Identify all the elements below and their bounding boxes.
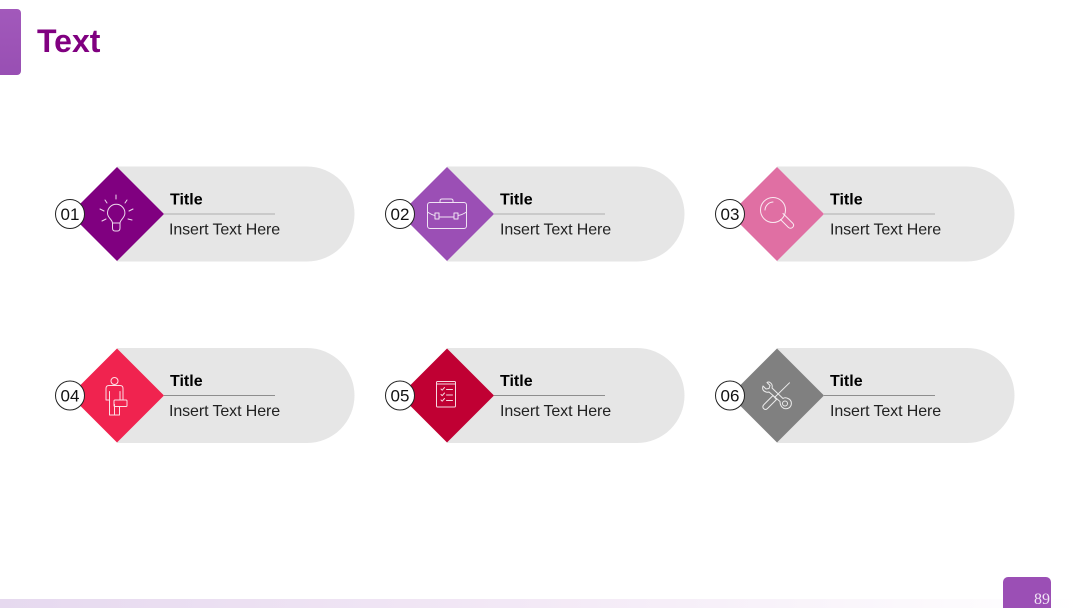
icon: briefcase (428, 199, 466, 228)
divider and card text (824, 373, 941, 420)
card 04 (56, 348, 354, 443)
icon: person with briefcase (106, 378, 127, 415)
number badge (386, 200, 414, 228)
pill background (447, 166, 684, 262)
number badge: 02 (391, 205, 409, 224)
icon: light bulb (100, 195, 133, 231)
card 06 (716, 348, 1014, 443)
divider and card text: Insert Text Here (830, 222, 941, 238)
diamond (400, 167, 494, 261)
divider and card text (494, 373, 611, 420)
diamond (70, 348, 164, 442)
divider and card text: Title (170, 192, 203, 208)
diamond (400, 348, 494, 442)
divider and card text: Insert Text Here (169, 403, 280, 420)
page number tab (1003, 577, 1051, 608)
pill background (777, 166, 1014, 262)
divider and card text: Insert Text Here (169, 222, 280, 238)
number badge: 03 (721, 205, 739, 224)
card 05 (386, 348, 684, 443)
pill background (777, 348, 1014, 443)
header accent tab (0, 9, 21, 75)
icon: checklist clipboard (436, 382, 456, 407)
divider and card text (494, 192, 611, 238)
divider and card text: Title (830, 192, 863, 208)
number badge: 01 (61, 205, 79, 224)
number badge (56, 381, 84, 410)
card 02 (386, 166, 684, 262)
icon: wrench and screwdriver (763, 382, 791, 410)
divider and card text (164, 192, 280, 238)
pill background (447, 348, 684, 443)
number badge: 06 (721, 386, 739, 406)
footer gradient bar (0, 599, 1080, 608)
divider and card text (824, 192, 941, 238)
card 03 (716, 166, 1014, 262)
pill background (117, 166, 354, 262)
divider and card text: Insert Text Here (500, 403, 611, 420)
page number: 89 (1034, 591, 1050, 608)
diamond (70, 167, 164, 261)
pill background (117, 348, 354, 443)
number badge: 04 (61, 386, 79, 406)
number badge: 05 (391, 386, 409, 406)
divider and card text: Insert Text Here (830, 403, 941, 420)
divider and card text: Title (170, 373, 203, 390)
number badge (716, 381, 744, 410)
number badge (716, 200, 744, 228)
diamond (730, 167, 824, 261)
icon: magnifying glass (760, 198, 794, 228)
card 01 (56, 166, 354, 262)
divider and card text: Insert Text Here (500, 222, 611, 238)
diamond (730, 348, 824, 442)
number badge (386, 381, 414, 410)
number badge (56, 200, 84, 228)
divider and card text: Title (500, 192, 533, 208)
divider and card text (164, 373, 280, 420)
divider and card text: Title (830, 373, 863, 390)
title: Text (37, 23, 101, 59)
divider and card text: Title (500, 373, 533, 390)
